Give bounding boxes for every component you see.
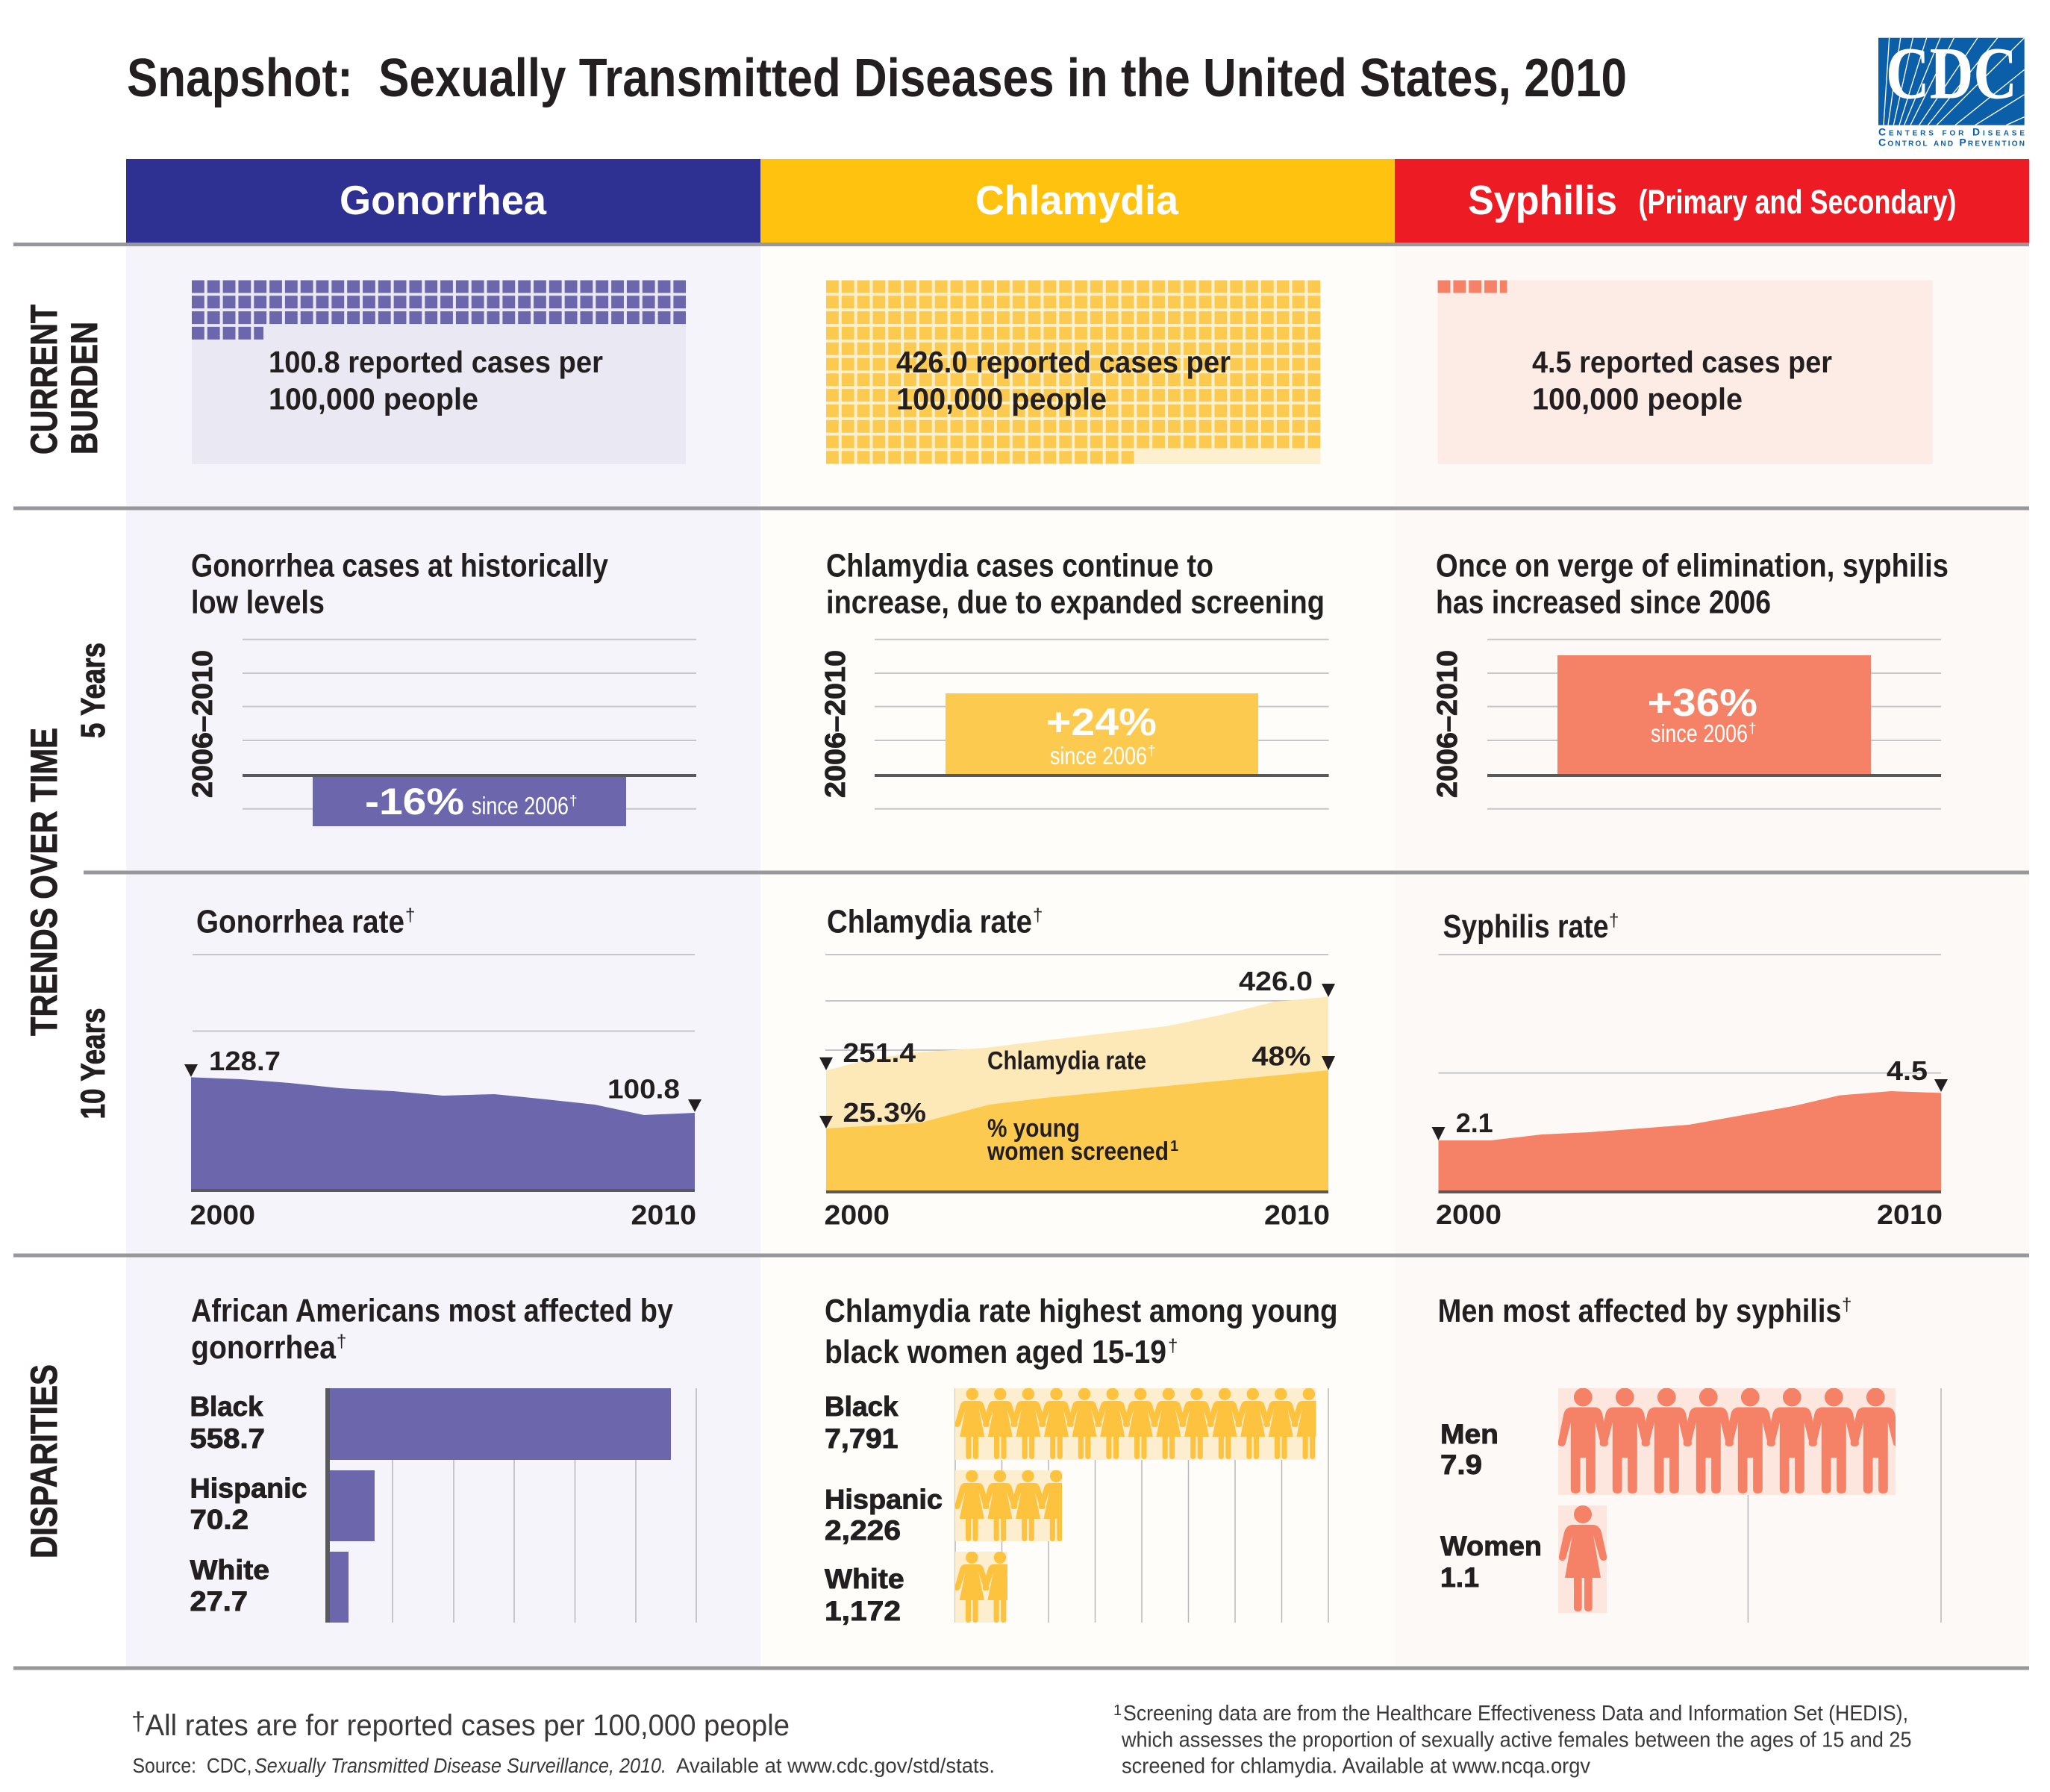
heading: gonorrhea disparities: † bbox=[337, 1331, 346, 1352]
bar chart: gonorrhea by race: Hispanic bbox=[190, 1473, 307, 1503]
bar chart: gonorrhea by race bbox=[190, 1388, 696, 1623]
footnote: rates: All rates are for reported cases per 100,000 people bbox=[146, 1709, 790, 1742]
heading: syphilis rate: † bbox=[1609, 911, 1619, 931]
row: black 13 figures bbox=[955, 1388, 1326, 1459]
header: Chlamydia: Chlamydia bbox=[975, 177, 1178, 223]
heading: chlamydia 5 year bbox=[826, 548, 1325, 621]
pictogram chart: syphilis by sex: 7.9 bbox=[1440, 1449, 1482, 1480]
row: woman figure bbox=[1559, 1505, 1607, 1611]
row: white figures bbox=[955, 1552, 1007, 1623]
header: Gonorrhea: Gonorrhea bbox=[340, 177, 546, 223]
chart: chlamydia 5 year change: 2006–2010 bbox=[820, 650, 851, 798]
chart: chlamydia 10 year area: Chlamydia rate bbox=[987, 1046, 1146, 1075]
row label: 5 years: 5 Years bbox=[74, 643, 112, 738]
header: Chlamydia bbox=[760, 159, 1395, 243]
panel: gonorrhea current burden bbox=[192, 281, 686, 464]
panel: chlamydia current burden: 100,000 people bbox=[896, 382, 1107, 416]
chart: chlamydia 5 year change: +24% bbox=[1046, 701, 1157, 744]
heading: gonorrhea 5 year bbox=[191, 548, 608, 621]
footnote: screening data: screened for chlamydia. Available at www.ncqa.orgv bbox=[1122, 1755, 1590, 1779]
heading: gonorrhea 5 year: low levels bbox=[191, 584, 325, 621]
row label: current burden: BURDEN bbox=[63, 322, 105, 455]
chart: syphilis 5 year change: +36% bbox=[1648, 681, 1757, 725]
chart: gonorrhea 5 year change: since 2006 bbox=[472, 792, 569, 819]
row label: trends over time: TRENDS OVER TIME bbox=[23, 728, 65, 1036]
pictogram chart: chlamydia by race: 7,791 bbox=[825, 1423, 899, 1454]
heading: chlamydia disparities: black women aged 15-19 bbox=[825, 1334, 1166, 1370]
row dividers bbox=[13, 245, 2029, 1668]
chart: chlamydia 10 year area: 48% bbox=[1252, 1040, 1310, 1072]
chart: chlamydia 10 year area: women screened bbox=[987, 1137, 1169, 1166]
chart: syphilis 5 year change bbox=[1432, 640, 1941, 809]
icon: CDC logo: Centers for Disease bbox=[1878, 126, 2025, 138]
pictogram chart: syphilis by sex: Women bbox=[1440, 1531, 1542, 1561]
row label: 10 years: 10 Years bbox=[74, 1008, 112, 1120]
panel: chlamydia current burden: 426.0 reported cases per bbox=[896, 345, 1231, 379]
heading: gonorrhea rate: Gonorrhea rate bbox=[196, 903, 404, 940]
panel: syphilis current burden bbox=[1438, 281, 1933, 464]
chart: gonorrhea 5 year change bbox=[187, 640, 696, 826]
heading: syphilis 5 year bbox=[1436, 548, 1949, 621]
chart: gonorrhea 5 year change: 2006–2010 bbox=[187, 650, 219, 798]
source: Sexually Transmitted Disease Surveillance, 2010. bbox=[254, 1754, 666, 1777]
heading: chlamydia disparities bbox=[825, 1293, 1338, 1370]
header: Syphilis bbox=[1395, 159, 2029, 243]
chart: syphilis 10 year area: 2010 bbox=[1877, 1199, 1943, 1230]
chart: chlamydia 10 year area: 251.4 bbox=[843, 1037, 916, 1068]
chart: chlamydia 5 year change: † bbox=[1148, 743, 1156, 759]
heading: chlamydia 5 year: Chlamydia cases continue to bbox=[826, 548, 1213, 584]
header: Syphilis: Syphilis bbox=[1468, 177, 1617, 223]
heading: chlamydia disparities: Chlamydia rate highest among young bbox=[825, 1293, 1338, 1329]
pictogram chart: chlamydia by race: Black bbox=[825, 1391, 899, 1422]
heading: syphilis 5 year: has increased since 2006 bbox=[1436, 584, 1771, 621]
chart: chlamydia 10 year area: 2000 bbox=[824, 1200, 890, 1230]
chart: chlamydia 5 year change: since 2006 bbox=[1050, 742, 1147, 769]
chart: chlamydia 10 year area: 2010 bbox=[1264, 1200, 1330, 1230]
chart: gonorrhea 5 year change: -16% bbox=[365, 781, 464, 822]
row: hispanic figures bbox=[955, 1470, 1062, 1541]
panel: syphilis current burden: 4.5 reported cases per bbox=[1532, 345, 1832, 379]
bar chart: gonorrhea by race: 27.7 bbox=[190, 1586, 248, 1617]
chart: gonorrhea 10 year area: 2000 bbox=[190, 1200, 255, 1230]
bar chart: gonorrhea by race: 70.2 bbox=[190, 1505, 249, 1535]
footnote: screening data bbox=[1113, 1702, 1912, 1779]
panel: gonorrhea current burden: 100.8 reported cases per bbox=[269, 345, 603, 379]
icon: CDC logo: CDC bbox=[1886, 32, 2017, 115]
pictogram chart: chlamydia by race: White bbox=[825, 1564, 904, 1594]
row: men figures bbox=[1558, 1388, 1901, 1493]
pictogram chart: syphilis by sex: Men bbox=[1440, 1419, 1499, 1449]
chart: chlamydia 5 year change bbox=[820, 640, 1329, 809]
chart: chlamydia 10 year area: 426.0 bbox=[1239, 966, 1313, 996]
panel: syphilis current burden: 100,000 people bbox=[1532, 382, 1743, 416]
heading: chlamydia rate: † bbox=[1033, 905, 1043, 925]
chart: gonorrhea 5 year change: † bbox=[569, 793, 578, 809]
pictogram chart: chlamydia by race: 2,226 bbox=[825, 1515, 901, 1546]
icon: CDC logo: Control and Prevention bbox=[1878, 137, 2025, 149]
heading: syphilis disparities: † bbox=[1842, 1295, 1851, 1315]
heading: gonorrhea disparities bbox=[191, 1293, 673, 1366]
source bbox=[133, 1754, 995, 1777]
chart: syphilis 5 year change: 2006–2010 bbox=[1432, 650, 1463, 798]
pictogram chart: syphilis by sex: 1.1 bbox=[1440, 1562, 1479, 1593]
heading: gonorrhea 5 year: Gonorrhea cases at historically bbox=[191, 548, 608, 584]
square grid: syphilis bbox=[1438, 281, 1507, 293]
pictogram chart: chlamydia by race: Hispanic bbox=[825, 1485, 943, 1515]
heading: syphilis rate: Syphilis rate bbox=[1443, 908, 1609, 945]
heading: chlamydia rate: Chlamydia rate bbox=[827, 903, 1032, 940]
footnote: screening data: which assesses the proportion of sexually active females between the ages of 15 and 25 bbox=[1121, 1729, 1912, 1752]
column backgrounds bbox=[126, 244, 2029, 1668]
pictogram chart: chlamydia by race: 1,172 bbox=[825, 1596, 901, 1626]
bar chart: gonorrhea by race: Black bbox=[190, 1391, 263, 1422]
source: Available at www.cdc.gov/std/stats. bbox=[676, 1754, 995, 1777]
heading: gonorrhea disparities: African Americans most affected by bbox=[191, 1293, 673, 1329]
chart: gonorrhea 10 year area: 100.8 bbox=[607, 1073, 680, 1105]
heading: chlamydia disparities: † bbox=[1168, 1336, 1178, 1356]
chart: chlamydia 10 year area: % young bbox=[987, 1114, 1080, 1143]
heading: chlamydia 5 year: increase, due to expanded screening bbox=[826, 584, 1325, 621]
row label: current burden bbox=[23, 305, 105, 455]
heading: gonorrhea disparities: gonorrhea bbox=[191, 1329, 336, 1366]
pictogram chart: syphilis by sex bbox=[1440, 1388, 1941, 1623]
bar chart: gonorrhea by race: White bbox=[190, 1555, 269, 1585]
chart: syphilis 5 year change: since 2006 bbox=[1651, 719, 1748, 747]
row label: disparities: DISPARITIES bbox=[23, 1364, 65, 1558]
header: Syphilis: (Primary and Secondary) bbox=[1639, 183, 1957, 221]
heading: gonorrhea rate: † bbox=[405, 905, 415, 925]
footnote: screening data: 1 bbox=[1113, 1702, 1122, 1719]
panel: chlamydia current burden bbox=[826, 281, 1320, 464]
chart: gonorrhea 10 year area bbox=[184, 955, 701, 1230]
bar chart: gonorrhea by race: 558.7 bbox=[190, 1423, 265, 1454]
panel: gonorrhea current burden: 100,000 people bbox=[269, 382, 478, 416]
icon: CDC logo bbox=[1878, 32, 2025, 149]
chart: gonorrhea 10 year area: 2010 bbox=[631, 1200, 696, 1230]
chart: chlamydia 10 year area bbox=[819, 955, 1335, 1230]
pictogram chart: chlamydia by race bbox=[825, 1388, 1328, 1626]
heading: syphilis disparities: Men most affected by syphilis bbox=[1438, 1293, 1842, 1329]
chart: syphilis 10 year area: 4.5 bbox=[1887, 1055, 1928, 1086]
square grid: gonorrhea bbox=[192, 287, 686, 333]
chart: syphilis 10 year area: 2.1 bbox=[1456, 1108, 1493, 1138]
heading: syphilis 5 year: Once on verge of elimination, syphilis bbox=[1436, 548, 1949, 584]
chart: syphilis 10 year area bbox=[1431, 955, 1948, 1230]
source: Source: CDC, bbox=[133, 1754, 252, 1777]
footnote: screening data: Screening data are from the Healthcare Effectiveness Data and Information Set (HEDIS), bbox=[1123, 1702, 1908, 1726]
chart: chlamydia 10 year area: 1 bbox=[1170, 1138, 1178, 1155]
chart: chlamydia 10 year area: 25.3% bbox=[843, 1097, 926, 1128]
row label: current burden: CURRENT bbox=[23, 305, 65, 455]
header: Gonorrhea bbox=[126, 159, 760, 243]
chart: gonorrhea 10 year area: 128.7 bbox=[209, 1046, 281, 1076]
title: Snapshot: Sexually Transmitted Diseases in the United States, 2010 bbox=[127, 49, 1627, 108]
chart: syphilis 10 year area: 2000 bbox=[1436, 1199, 1501, 1230]
chart: syphilis 5 year change: † bbox=[1749, 721, 1757, 737]
footnote: rates: † bbox=[131, 1708, 146, 1736]
square grid: chlamydia bbox=[826, 287, 1320, 458]
